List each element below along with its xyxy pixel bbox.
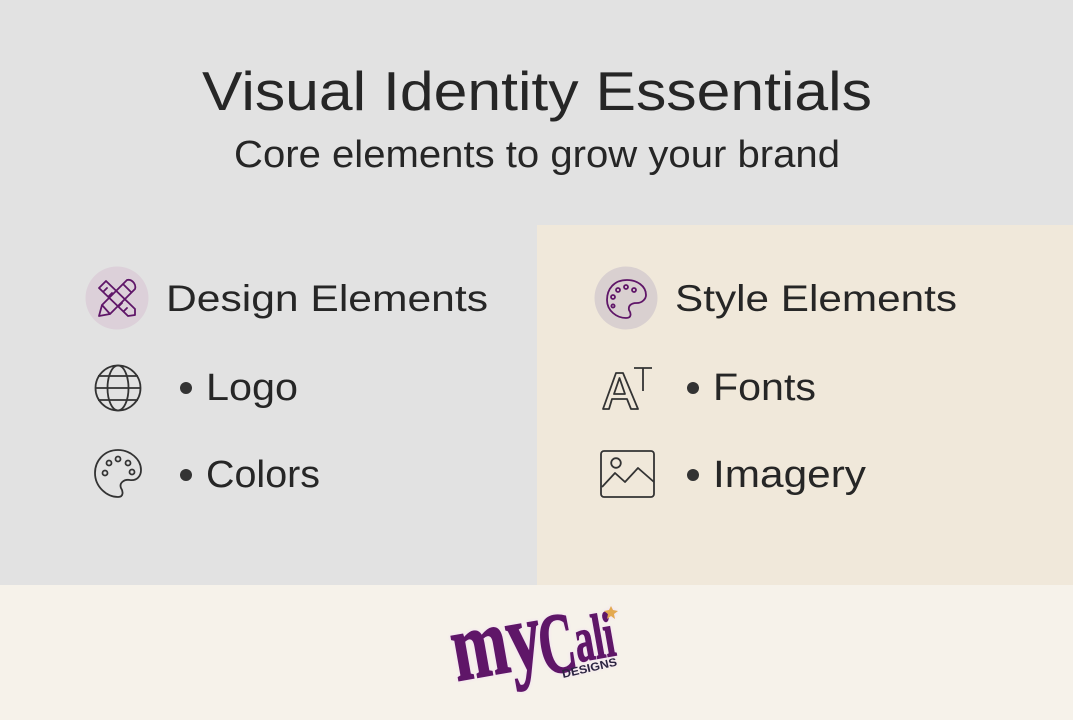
panel: design elements bbox=[86, 266, 488, 497]
subtitle: Core elements to grow your brand bbox=[234, 134, 840, 176]
heading: style elements: Style Elements bbox=[675, 278, 957, 319]
list item: logo: Logo bbox=[206, 367, 298, 409]
panel: style elements bbox=[594, 266, 957, 497]
list item: imagery: Imagery bbox=[713, 454, 866, 496]
logo tagline: DESIGNS bbox=[561, 657, 619, 681]
icon: font glyphs bbox=[603, 368, 652, 409]
icon: pencil and ruler bbox=[86, 266, 148, 330]
list item: colors: Colors bbox=[206, 454, 320, 496]
logo: myCali Designs: C bbox=[531, 593, 583, 694]
logo star bbox=[604, 606, 618, 619]
icon: image frame bbox=[601, 451, 654, 497]
list item: fonts: Fonts bbox=[713, 367, 816, 409]
logo: myCali Designs: ali bbox=[568, 599, 620, 676]
panel: style elements background bbox=[537, 225, 1073, 585]
icon: palette badge bbox=[594, 266, 658, 330]
heading: design elements: Design Elements bbox=[166, 278, 488, 319]
logo: myCali Designs: my bbox=[442, 581, 549, 703]
panel: footer band bbox=[0, 585, 1073, 720]
title: Visual Identity Essentials bbox=[202, 60, 872, 122]
icon: globe bbox=[96, 366, 140, 410]
icon: palette bbox=[95, 450, 141, 497]
